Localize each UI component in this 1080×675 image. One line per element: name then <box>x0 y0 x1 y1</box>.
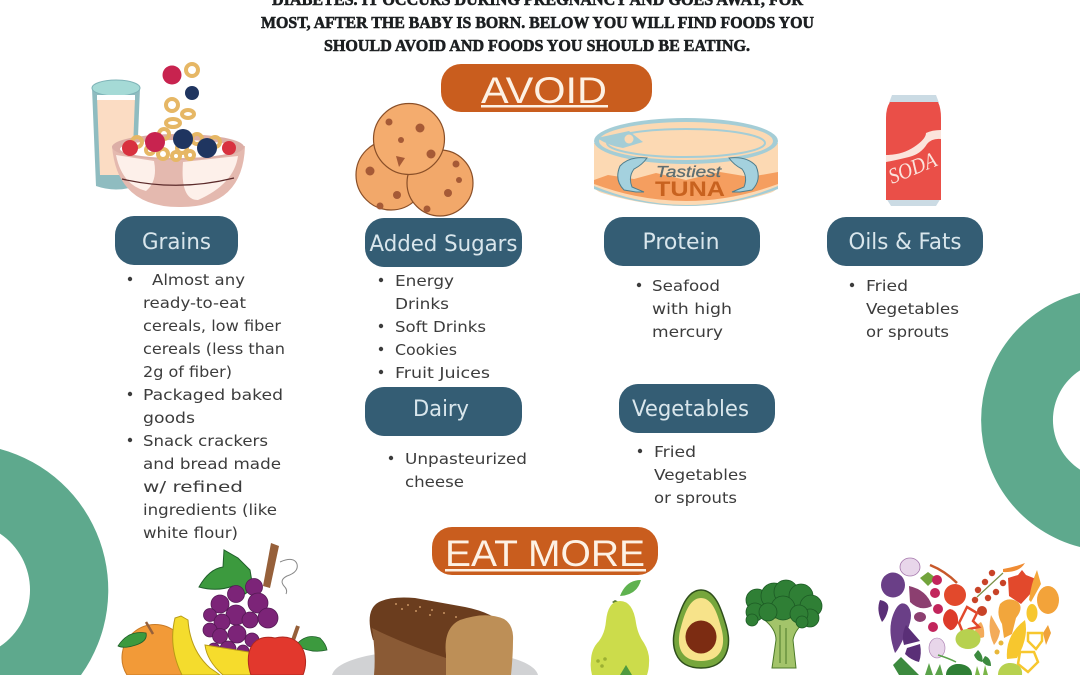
grains list: ready-to-eat <box>143 294 246 312</box>
oils and fats list <box>850 277 959 341</box>
protein list: Seafood <box>652 277 720 295</box>
avoid banner: AVOID <box>481 70 607 111</box>
vegetables list: Vegetables <box>654 466 747 484</box>
grains list: ingredients (like <box>143 501 277 519</box>
vegetables list: or sprouts <box>654 489 737 507</box>
category: dairy <box>365 387 522 436</box>
category: protein: Protein <box>642 230 720 255</box>
category: vegetables: Vegetables <box>632 397 749 422</box>
added sugars list: Soft Drinks <box>395 318 486 336</box>
category: grains <box>115 216 238 265</box>
category: oils and fats <box>827 217 983 266</box>
right green ring <box>981 293 1080 547</box>
dairy list: cheese <box>405 473 464 491</box>
eat more banner: EAT MORE <box>445 533 645 574</box>
added sugars list: Cookies <box>395 341 457 359</box>
grains list: and bread made <box>143 455 281 473</box>
category: added sugars: Added Sugars <box>370 232 518 257</box>
category: added sugars <box>365 218 522 267</box>
vegetables list: Fried <box>654 443 696 461</box>
added sugars list: Fruit Juices <box>395 364 490 382</box>
grains list: white flour) <box>143 524 238 542</box>
intro heading text <box>261 0 814 55</box>
icon: pear <box>591 580 649 675</box>
grains list: goods <box>143 409 195 427</box>
avoid banner <box>441 64 652 112</box>
oils and fats list: Vegetables <box>866 300 959 318</box>
icon: vegetable heart <box>878 558 1059 675</box>
grains list <box>128 271 285 542</box>
icon: cereal bowl and milk <box>92 64 245 207</box>
protein list <box>637 277 732 341</box>
category: dairy: Dairy <box>413 397 469 422</box>
oils and fats list: Fried <box>866 277 908 295</box>
icon: broccoli <box>746 580 822 668</box>
added sugars list <box>379 272 490 382</box>
grains list: cereals (less than <box>143 340 285 358</box>
oils and fats list: or sprouts <box>866 323 949 341</box>
category: grains: Grains <box>142 230 211 255</box>
vegetables list <box>638 443 747 507</box>
left green ring <box>0 449 108 675</box>
intro heading text: MOST, AFTER THE BABY IS BORN. BELOW YOU WILL FIND FOODS YOU <box>261 13 814 32</box>
icon: tuna can: Tastiest <box>656 164 722 181</box>
icon: tuna can: TUNA <box>655 178 725 201</box>
category: protein <box>604 217 760 266</box>
grains list: Packaged baked <box>143 386 283 404</box>
icon: soda can <box>885 95 941 206</box>
icon: bread loaf <box>332 598 538 675</box>
protein list: with high <box>652 300 732 318</box>
icon: fruit pile <box>118 543 327 675</box>
category: oils and fats: Oils & Fats <box>848 230 962 255</box>
icon: cookies <box>356 104 473 216</box>
grains list: 2g of fiber) <box>143 363 232 381</box>
grains list: w/ refined <box>143 478 243 496</box>
grains list: Snack crackers <box>143 432 268 450</box>
grains list: Almost any <box>152 271 245 289</box>
protein list: mercury <box>652 323 723 341</box>
category: vegetables <box>619 384 775 433</box>
icon: soda can: SODA <box>885 147 941 189</box>
added sugars list: Energy <box>395 272 454 290</box>
dairy list: Unpasteurized <box>405 450 527 468</box>
grains list: cereals, low fiber <box>143 317 282 335</box>
icon: tuna can <box>594 118 778 206</box>
added sugars list: Drinks <box>395 295 449 313</box>
dairy list <box>389 450 527 491</box>
icon: avocado <box>674 590 728 668</box>
intro heading text: SHOULD AVOID AND FOODS YOU SHOULD BE EATING. <box>324 36 750 55</box>
